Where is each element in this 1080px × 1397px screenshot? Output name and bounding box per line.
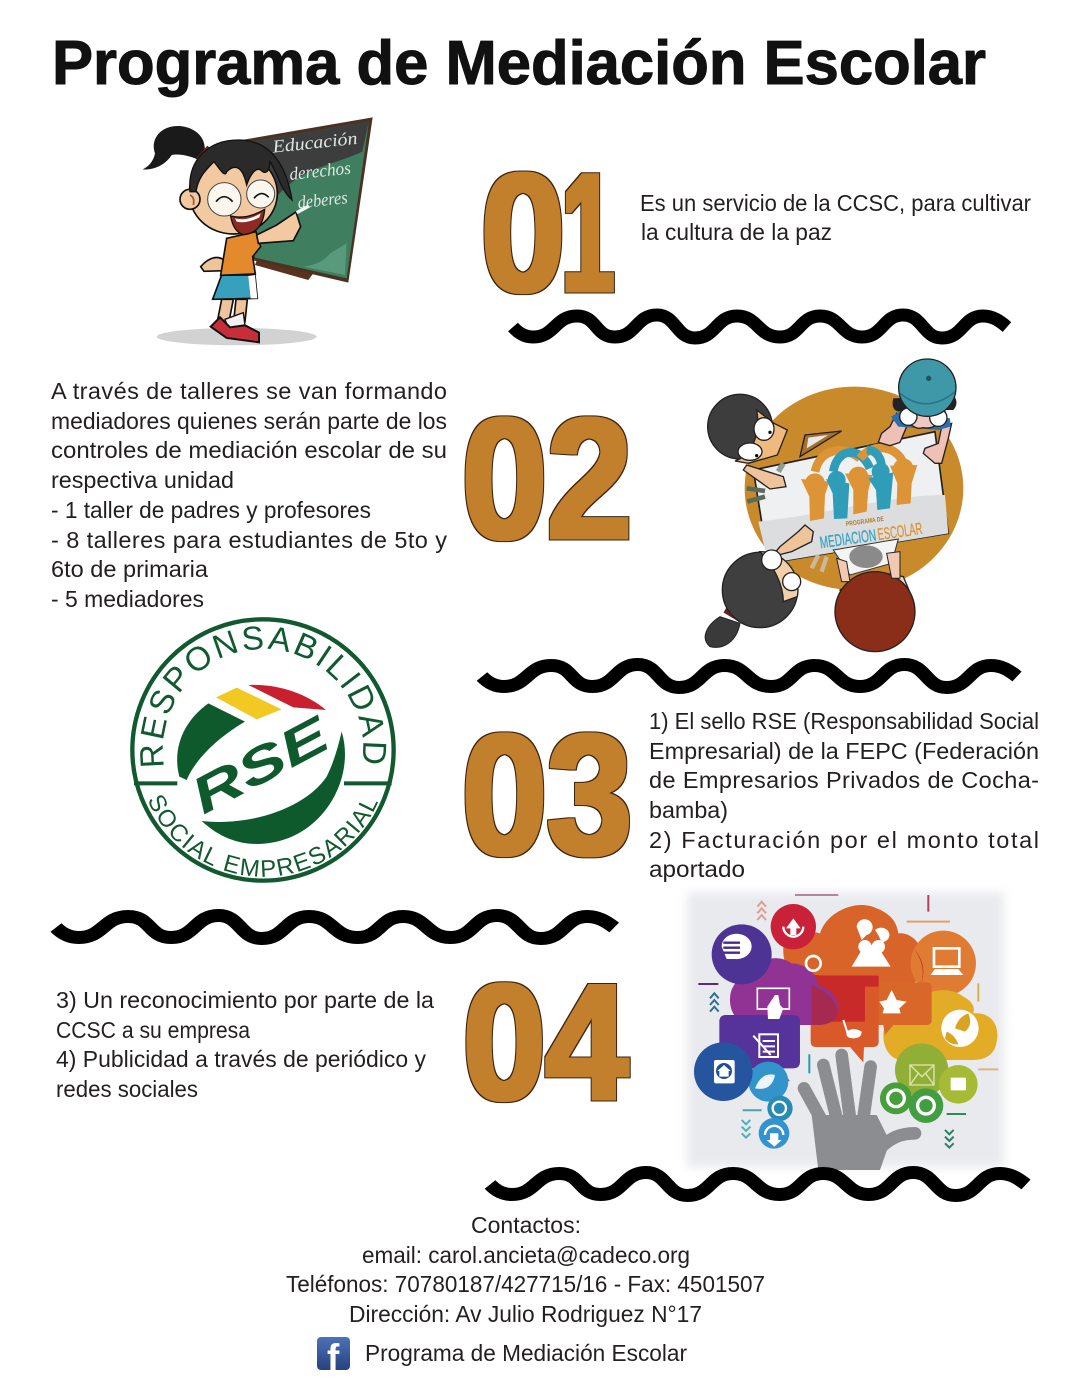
contact block: email: carol.ancieta@cadeco.org [362, 1242, 690, 1268]
divider wave 1 [513, 315, 1007, 338]
illustration: girl at chalkboard: deberes [297, 187, 348, 212]
number 04: 04 [463, 950, 628, 1134]
number 02: 02 [462, 383, 632, 575]
text block 03 [649, 708, 1039, 882]
icon: facebook [317, 1337, 350, 1378]
illustration: girl at chalkboard: derechos [288, 158, 352, 184]
contact block: Teléfonos: 70780187/427715/16 - Fax: 4501507 [286, 1271, 765, 1297]
text block 03: 1) El sello RSE (Responsabilidad Social [649, 708, 1039, 734]
contact block [286, 1212, 765, 1327]
illustration: children around school mediation poster: PROGRAMA DE [845, 516, 885, 528]
number 01: 0 [481, 138, 565, 327]
facebook page name: Programa de Mediación Escolar [365, 1340, 687, 1366]
text block 04: redes sociales [56, 1076, 198, 1102]
illustration: children around school mediation poster: ESCOLAR [876, 519, 924, 544]
text block 02: - 8 talleres para estudiantes de 5to y [51, 527, 447, 553]
text block 02: respectiva unidad [51, 467, 234, 493]
text block 01: Es un servicio de la CCSC, para cultivar [640, 190, 1031, 216]
logo: RSE seal: RSE [182, 704, 341, 825]
logo: RSE seal [130, 617, 396, 883]
divider wave 2 [482, 664, 1017, 688]
text block 02: A través de talleres se van formando [51, 378, 447, 404]
illustration: girl at chalkboard [143, 117, 373, 345]
number 03: 03 [462, 699, 632, 891]
illustration: hand with social media icons [687, 892, 1004, 1170]
text block 02: - 5 mediadores [51, 586, 204, 612]
text block 04 [56, 987, 435, 1102]
logo: RSE seal: RESPONSABILIDAD [140, 626, 386, 766]
divider wave 4 [490, 1172, 1026, 1196]
text block 03: de Empresarios Privados de Cocha- [649, 767, 1039, 793]
contact block: Contactos: [471, 1212, 581, 1238]
illustration: children around school mediation poster: MEDIACION [819, 526, 877, 552]
text block 03: aportado [649, 856, 745, 882]
text block 02: mediadores quienes serán parte de los [51, 408, 447, 434]
text block 02: 6to de primaria [51, 556, 209, 582]
logo: RSE seal: SOCIAL EMPRESARIAL [149, 795, 378, 877]
text block 03: bamba) [649, 797, 728, 823]
number 01: 1 [562, 138, 614, 327]
title: Programa de Mediación Escolar [52, 29, 986, 98]
divider wave 3 [56, 916, 614, 938]
text block 03: Empresarial) de la FEPC (Federación [649, 738, 1039, 764]
text block 01: la cultura de la paz [641, 219, 832, 245]
text block 02: controles de mediación escolar de su [51, 437, 447, 463]
text block 02 [51, 378, 447, 612]
text block 03: 2) Facturación por el monto total [649, 827, 1039, 853]
illustration: children around school mediation poster [705, 359, 963, 652]
text block 04: 3) Un reconocimiento por parte de la [56, 987, 435, 1013]
text block 02: - 1 taller de padres y profesores [51, 497, 371, 523]
text block 04: CCSC a su empresa [56, 1017, 251, 1043]
text block 04: 4) Publicidad a través de periódico y [56, 1046, 426, 1072]
contact block: Dirección: Av Julio Rodriguez N°17 [349, 1301, 702, 1327]
illustration: girl at chalkboard: Educación [271, 128, 358, 157]
text block 01 [640, 190, 1031, 245]
icon: facebook: f [327, 1337, 340, 1378]
